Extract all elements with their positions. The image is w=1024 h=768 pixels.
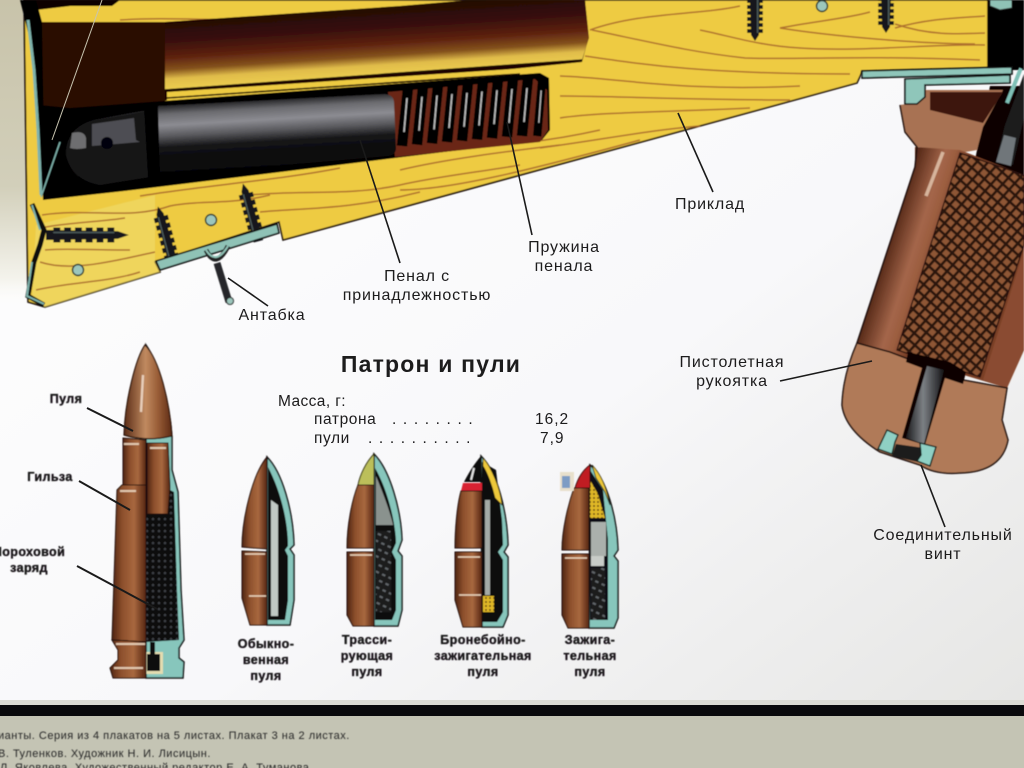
caption: tracer bullet: пуля: [351, 665, 383, 679]
caption: tracer bullet: рующая: [341, 649, 393, 663]
bullet: armor-piercing incendiary: [455, 456, 508, 627]
caption: incendiary bullet: пуля: [574, 665, 606, 679]
bullet mass row: ..........: [368, 430, 477, 447]
top black screw fragment: [24, 0, 120, 10]
footer line 2: В. Туленков. Художник Н. И. Лисицын.: [0, 748, 211, 760]
wood grain lines: [36, 6, 985, 290]
stock wood body: [24, 0, 988, 307]
bracket bolt: [990, 0, 1012, 10]
dark recess: [930, 92, 1003, 123]
grip base block: [842, 343, 1008, 473]
spring: [402, 78, 542, 146]
screw head: [892, 444, 924, 462]
case left body: [112, 485, 146, 642]
label: case spring: пенала: [535, 258, 593, 275]
footer band above rule: [0, 700, 1024, 706]
powder charge: [146, 490, 179, 642]
rear screws and pins: [46, 182, 265, 276]
upper dark cavity: [40, 0, 588, 150]
primer: [146, 652, 163, 674]
cartridge labels: [0, 392, 617, 683]
shaft highlight: [926, 152, 943, 196]
label: case: Гильза: [27, 470, 73, 484]
label: accessory case: Пенал с: [384, 268, 450, 285]
pistol grip: [842, 67, 1024, 473]
label: butt stock: Приклад: [675, 196, 745, 213]
case highlights: [114, 444, 166, 668]
footer text: [0, 730, 350, 768]
bullet tip: [124, 345, 172, 439]
cartridge mass row: ........: [392, 411, 479, 428]
label: accessory case: принадлежностью: [343, 287, 491, 304]
rear black section: [988, 0, 1024, 70]
label: pistol grip: Пистолетная: [680, 354, 784, 371]
case left base: [110, 640, 146, 678]
checkered panel: [897, 153, 1024, 377]
screw rod: [906, 366, 944, 444]
casing teal outer: [146, 345, 184, 678]
front screws and pin: [747, 0, 894, 41]
mass table: [278, 393, 569, 447]
sling swivel: [156, 224, 279, 304]
cavity divider lines: [165, 60, 582, 98]
stock labels: [239, 196, 1013, 563]
grip shaft: [857, 147, 1024, 388]
footer line 1: ианты. Серия из 4 плакатов на 5 листах. Плакат 3 на 2 листах.: [0, 730, 350, 742]
footer strip: [0, 716, 1024, 768]
dark left recess: [40, 22, 165, 150]
butt plate: [20, 0, 64, 305]
rod recess: [902, 352, 966, 445]
caption: armor-piercing incendiary bullet: зажигательная: [434, 649, 532, 663]
bullet mass row: 7,9: [540, 430, 565, 447]
cartridge mass row: 16,2: [535, 411, 569, 428]
upper threaded rod: [996, 74, 1024, 165]
cartridge mass row: патрона: [314, 411, 376, 428]
bullet mass row: пули: [314, 430, 350, 447]
caption: ordinary bullet: Обыкно-: [238, 637, 294, 651]
stock and grip leader lines: [52, 0, 945, 527]
bullet: incendiary: [562, 465, 618, 628]
caption: incendiary bullet: тельная: [563, 649, 617, 663]
mass caption: Масса, г:: [278, 393, 346, 410]
label: pistol grip: рукоятка: [696, 373, 768, 390]
heading: Патрон и пули: [341, 351, 521, 377]
cartridge cutaway: [110, 345, 184, 678]
label: sling swivel: Антабка: [239, 307, 305, 324]
bullet: ordinary: [242, 457, 294, 625]
label: connecting screw: Соединительный: [873, 527, 1013, 544]
label: bullet: Пуля: [50, 392, 82, 406]
pale wood at the stock heel: [32, 195, 160, 307]
rifle stock cutaway: [20, 0, 1024, 307]
lower black cavity: [40, 73, 550, 200]
grip upper block: [900, 90, 1003, 153]
caption: armor-piercing incendiary bullet: пуля: [467, 665, 499, 679]
cartridge leader lines: [77, 408, 157, 609]
label: connecting screw: винт: [924, 546, 962, 563]
caption: tracer bullet: Трасси-: [342, 633, 392, 647]
grip outline: [857, 105, 917, 343]
label: powder charge: заряд: [10, 561, 48, 575]
caption: incendiary bullet: Зажига-: [565, 633, 615, 647]
teal nut left: [878, 430, 898, 454]
upper cavity gradient wall: [165, 0, 589, 90]
label: case spring: Пружина: [528, 239, 600, 256]
caption: ordinary bullet: венная: [243, 653, 289, 667]
teal nut right: [917, 443, 936, 466]
accessory case: [66, 94, 396, 186]
caption: armor-piercing incendiary bullet: Бронебойно-: [440, 633, 526, 647]
wall edge at upper left: [0, 0, 34, 310]
bullet: tracer: [347, 454, 402, 626]
right shaft strip: [983, 250, 1024, 388]
black rule: [0, 705, 1024, 716]
bullet right half: [147, 443, 170, 514]
case left neck: [123, 438, 146, 486]
spring channel: [388, 79, 548, 157]
upper steel plates: [862, 67, 1012, 78]
paper scrap sticker: [560, 472, 574, 491]
caption: ordinary bullet: пуля: [250, 669, 282, 683]
rear dark interior: [975, 86, 1024, 180]
